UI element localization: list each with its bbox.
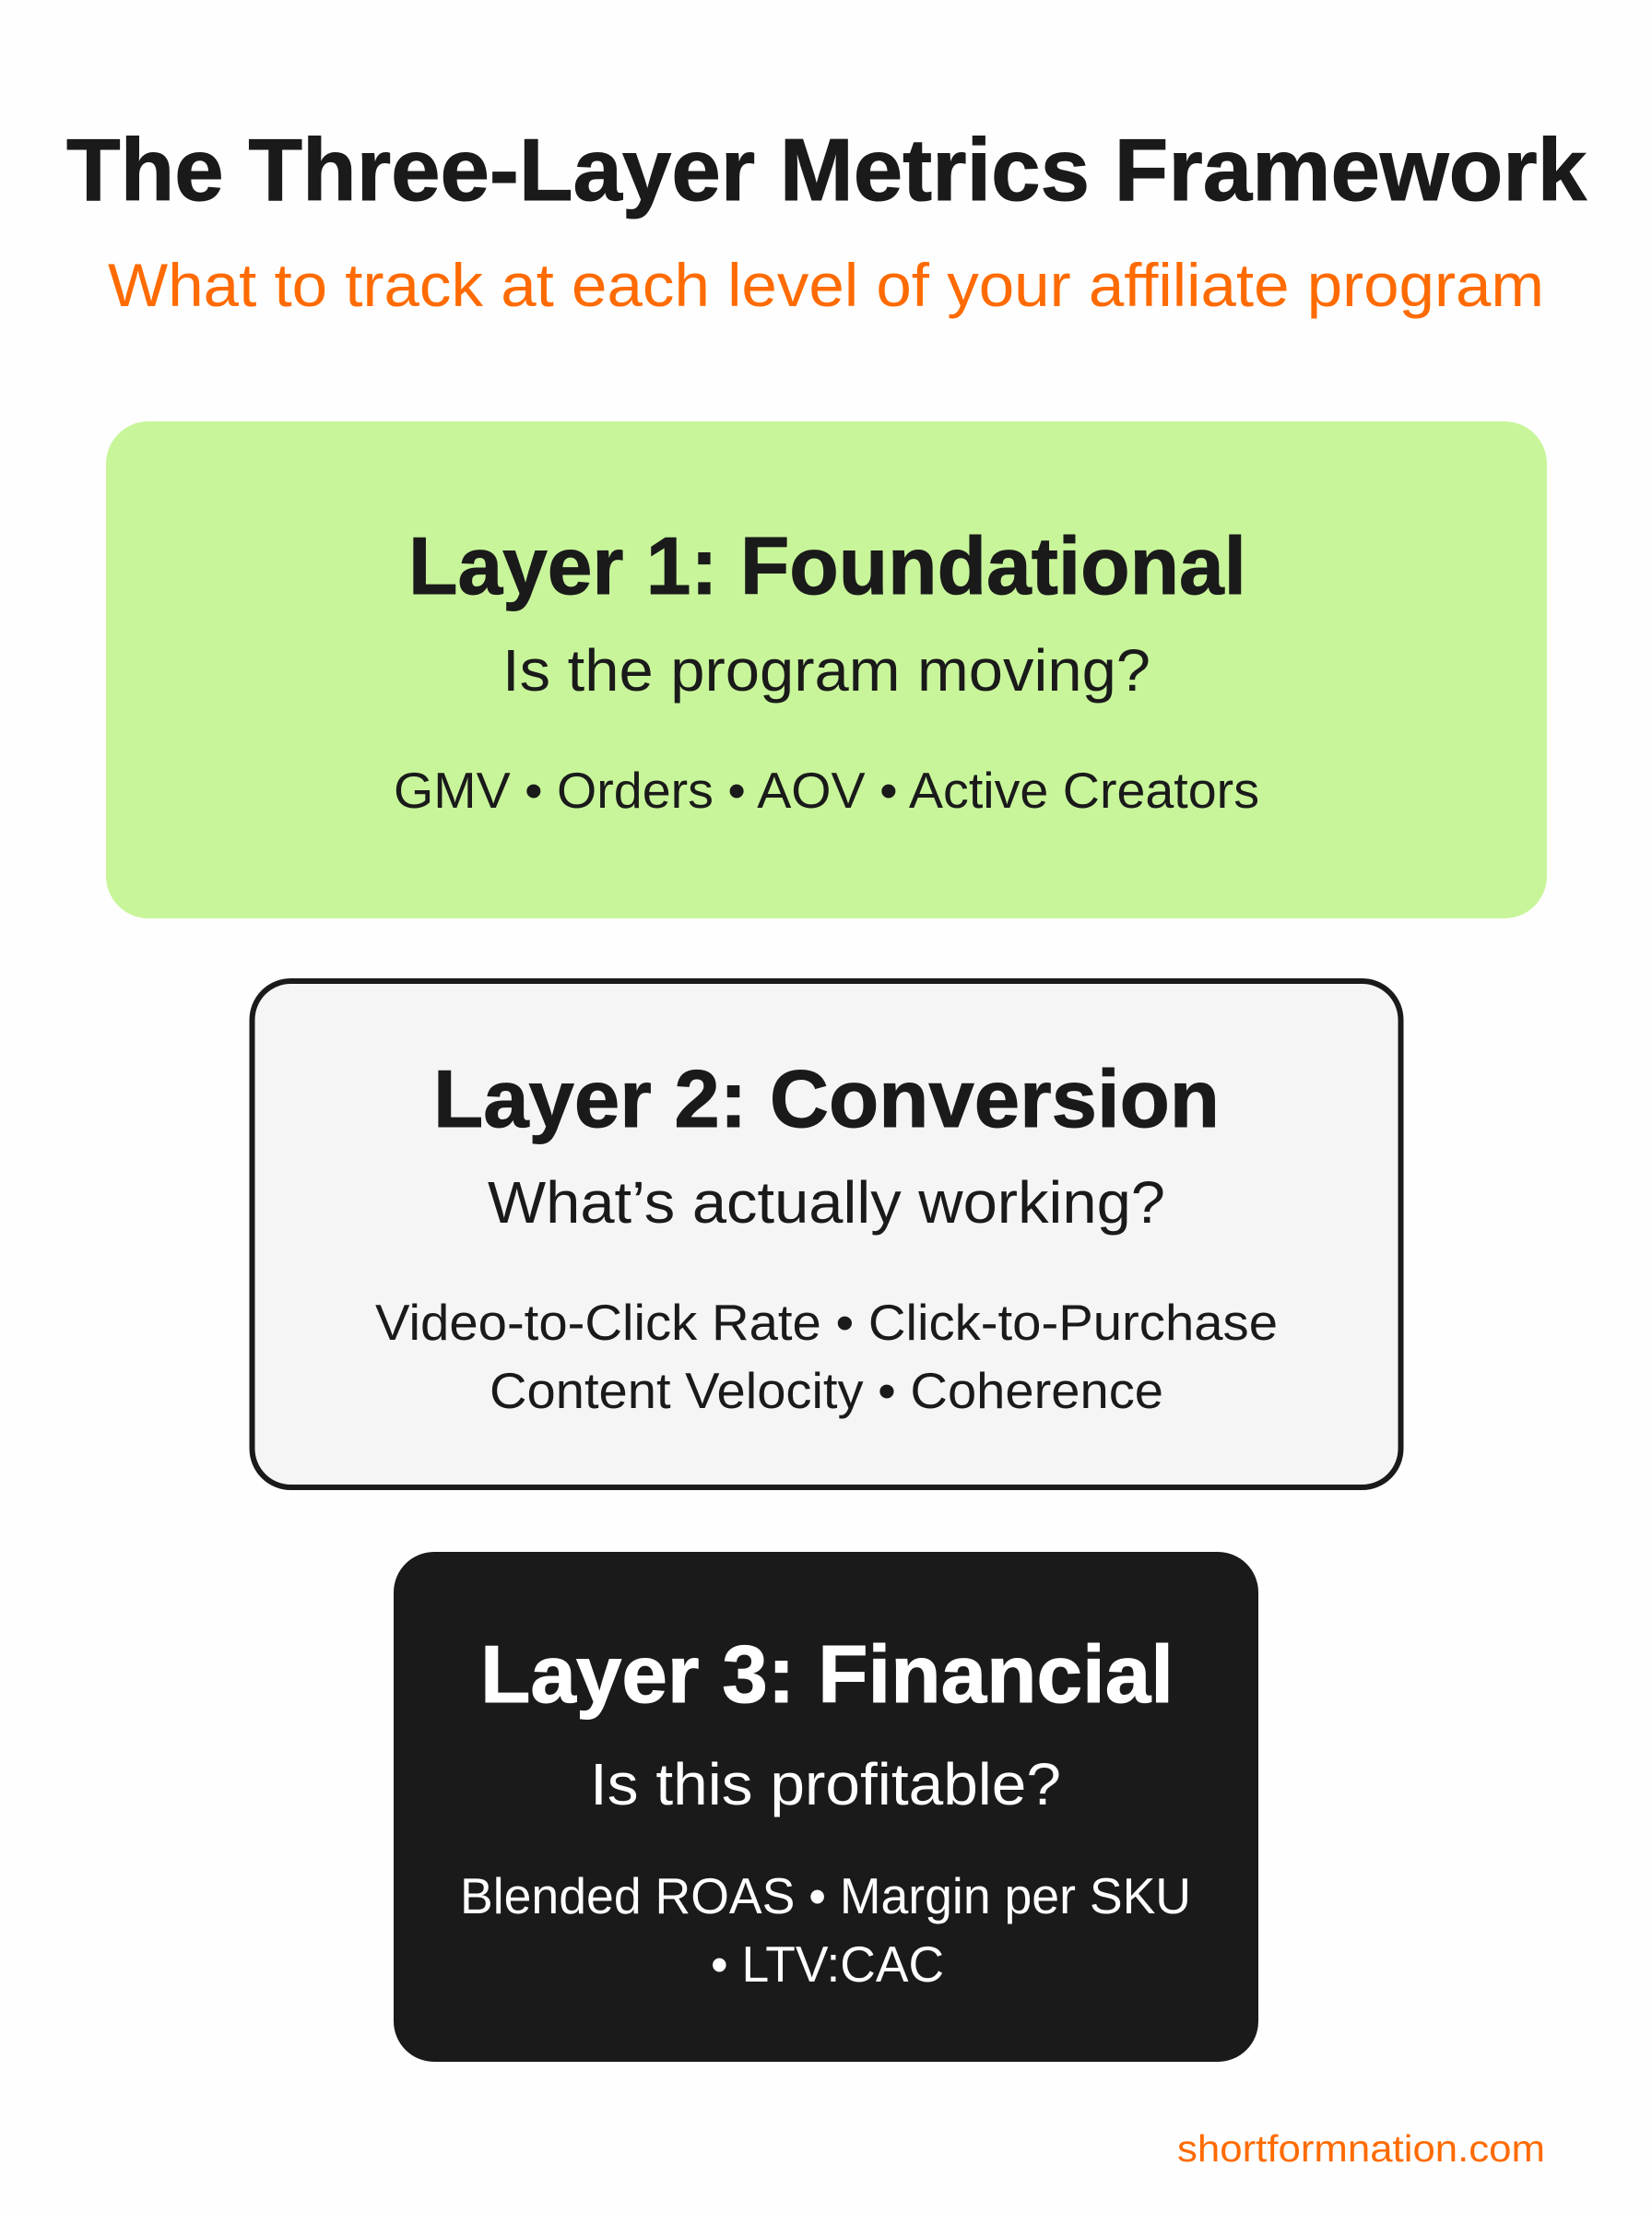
layer 3 metrics: Blended ROAS • Margin per SKU — [460, 1867, 1191, 1924]
footer url: shortformnation.com — [1177, 2127, 1545, 2170]
panel: layer 1 foundational — [106, 421, 1547, 918]
layer 1 question: Is the program moving? — [502, 637, 1150, 704]
layer 1 heading: Layer 1: Foundational — [408, 520, 1246, 611]
layer 3 heading: Layer 3: Financial — [480, 1628, 1174, 1720]
subtitle: What to track at each level of your affiliate program — [108, 251, 1544, 319]
layer 3 question: Is this profitable? — [590, 1751, 1061, 1817]
layer 2 metrics: Content Velocity • Coherence — [490, 1362, 1163, 1419]
layer 3 metrics: • LTV:CAC — [711, 1935, 944, 1993]
panel: layer 3 financial — [394, 1552, 1258, 2062]
layer 2 metrics: Video-to-Click Rate • Click-to-Purchase — [375, 1294, 1278, 1351]
layer 1 metrics: GMV • Orders • AOV • Active Creators — [394, 762, 1259, 819]
layer 2 question: What’s actually working? — [488, 1169, 1165, 1236]
layer 3 metrics — [460, 1867, 1191, 1993]
layer 2 metrics — [375, 1294, 1278, 1419]
layer 2 heading: Layer 2: Conversion — [433, 1053, 1220, 1144]
panel: layer 2 conversion — [253, 981, 1401, 1487]
title: The Three-Layer Metrics Framework — [66, 121, 1587, 219]
